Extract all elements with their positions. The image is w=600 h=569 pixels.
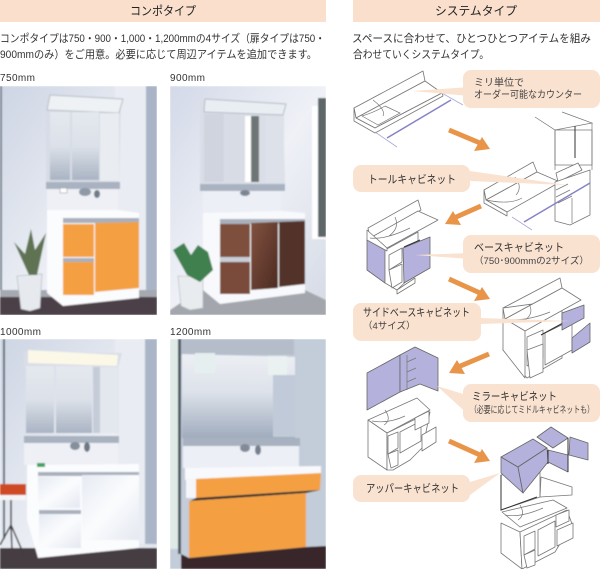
photo: 1200mm vanity <box>170 339 326 569</box>
diagram: base cabinet <box>367 200 438 294</box>
intro text: system type: 合わせていくシステムタイプ。 <box>353 48 489 61</box>
panel: system type <box>352 0 600 569</box>
diagram: tall cabinet and counter <box>484 112 592 230</box>
callout: base cabinet: ベースキャビネット <box>474 241 564 254</box>
callout: tall cabinet: トールキャビネット <box>368 173 456 186</box>
callout: side base cabinet <box>353 303 570 341</box>
photo: 1000mm vanity <box>0 339 157 569</box>
diagram: mirror cabinet <box>367 347 438 470</box>
arrow: counter to tall cabinet <box>449 130 490 151</box>
callout: counter: オーダー可能なカウンター <box>474 88 582 101</box>
heading: combo type <box>0 0 326 22</box>
callout: mirror cabinet: ミラーキャビネット <box>472 390 557 403</box>
intro text: combo type: 900mmのみ）をご用意。必要に応じて周辺アイテムを追加できます。 <box>0 47 317 61</box>
heading: system type <box>353 0 600 22</box>
callout: side base cabinet: （4サイズ） <box>363 320 416 332</box>
callout: mirror cabinet <box>437 384 600 422</box>
size label: 900mm: 900mm <box>170 73 205 84</box>
callout: side base cabinet: サイドベースキャビネット <box>363 306 470 319</box>
size label: 1000mm: 1000mm <box>0 327 41 338</box>
callout: counter <box>412 70 600 108</box>
intro text: combo type: コンポタイプは750・900・1,000・1,200mmの4サイズ（扉タイプは750・ <box>0 31 325 45</box>
photo: 750mm vanity <box>0 86 157 315</box>
diagram: side base cabinet <box>503 278 590 378</box>
diagram: counter <box>354 71 463 147</box>
arrow: to side base cabinet <box>449 279 490 301</box>
size label: 1200mm: 1200mm <box>170 327 211 338</box>
arrow: to upper cabinet <box>449 441 490 463</box>
callout: base cabinet <box>415 235 600 273</box>
callout: base cabinet: （750･900mmの2サイズ） <box>474 255 589 267</box>
arrow: to mirror cabinet <box>449 354 489 374</box>
photo: 900mm vanity <box>170 86 326 315</box>
panel: combo type <box>0 0 328 569</box>
callout: counter: ミリ単位で <box>474 76 524 89</box>
arrow: to base cabinet <box>445 206 481 225</box>
callout: upper cabinet: アッパーキャビネット <box>366 482 459 495</box>
intro text: system type: スペースに合わせて、ひとつひとつアイテムを組み <box>352 32 591 45</box>
callout: tall cabinet <box>353 165 567 192</box>
callout: upper cabinet <box>353 473 500 502</box>
diagram: upper cabinet <box>501 427 588 569</box>
size label: 750mm: 750mm <box>0 73 35 84</box>
heading: system type: システムタイプ <box>435 4 517 18</box>
heading: combo type: コンポタイプ <box>130 4 196 18</box>
